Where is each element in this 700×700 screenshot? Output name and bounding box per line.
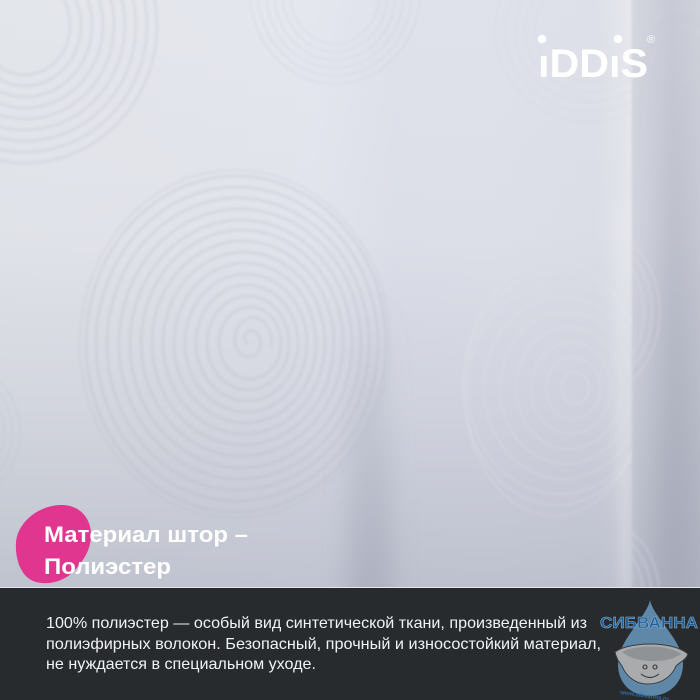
spiral pattern: top right [495, 0, 685, 122]
description text [46, 615, 601, 673]
description text: 100% полиэстер — особый вид синтетической ткани, произведенный из [46, 615, 587, 632]
bottom dark panel [0, 587, 700, 700]
icon: water drop [618, 600, 683, 696]
spiral pattern: top centre [250, 0, 420, 84]
registered mark: ® [647, 34, 655, 46]
spiral pattern: left edge arcs [0, 362, 20, 502]
logo dot: first i [538, 35, 546, 43]
spiral pattern: lower right [464, 260, 652, 516]
heading: Материал штор – [44, 522, 248, 547]
spiral pattern: large central [80, 170, 390, 518]
spiral pattern: right edge arcs [648, 559, 660, 587]
accent blob [16, 505, 91, 583]
icon: bathtub [615, 644, 688, 684]
heading [44, 522, 248, 579]
description text: полиэфирных волокон. Безопасный, прочный и износостойкий материал, [46, 636, 601, 653]
logo: IDDIS: ıDDıS [538, 42, 648, 86]
description text: не нуждается в специальном уходе. [46, 656, 316, 673]
heading: Полиэстер [44, 554, 171, 579]
spiral pattern: top left [0, 0, 157, 163]
icon: bathtub inner [622, 647, 681, 661]
icon: bathtub face [641, 665, 659, 678]
watermark name: СИБВАННА [600, 615, 698, 632]
watermark: Sibvanna logo [600, 600, 698, 700]
logo dot: second i [614, 35, 622, 43]
